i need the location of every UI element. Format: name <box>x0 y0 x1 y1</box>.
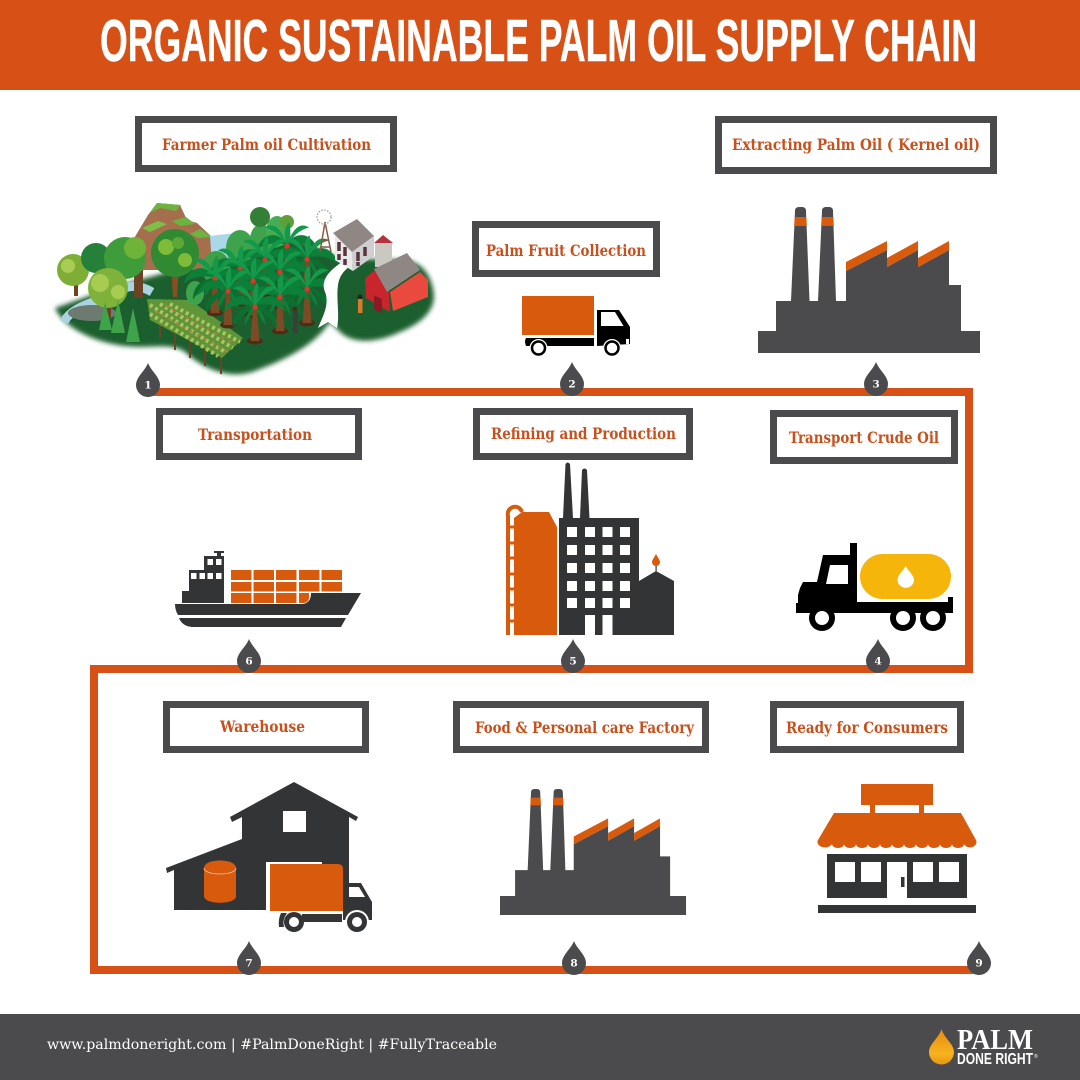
logo <box>929 1025 1038 1068</box>
label: Farmer Palm oil Cultivation: Farmer Palm oil Cultivation <box>162 135 371 154</box>
store sign <box>861 784 933 813</box>
tank oil drop <box>898 566 914 588</box>
store front <box>827 854 967 898</box>
icon: extraction factory <box>758 207 980 353</box>
logo oil drop <box>929 1029 954 1064</box>
storage tank with ladder <box>508 507 557 635</box>
white path <box>318 262 355 328</box>
label: Farmer Palm oil Cultivation <box>138 120 394 168</box>
factory orange accents <box>794 217 949 271</box>
label: Refining and Production: Refining and Production <box>491 424 676 443</box>
illustration: palm farm landscape <box>55 203 434 374</box>
farmhouse <box>333 219 374 271</box>
label: Food and Personal care Factory: Food & Personal care Factory <box>475 718 695 737</box>
step marker 4: 4 <box>874 656 882 668</box>
step marker 5 <box>561 639 585 673</box>
icon: food and personal care factory <box>500 789 686 915</box>
crop rows <box>147 299 243 374</box>
icon: collection truck <box>522 296 630 357</box>
icon: refinery <box>508 462 674 635</box>
ground <box>55 236 434 374</box>
truck chassis and wheels <box>302 914 342 922</box>
building with windows <box>559 518 674 635</box>
step marker 1: 1 <box>144 380 152 392</box>
step marker 7: 7 <box>245 958 253 970</box>
ship hull <box>175 593 361 615</box>
woman figure <box>358 294 362 313</box>
ship superstructure <box>182 551 224 603</box>
truck cab <box>343 883 372 920</box>
label: Palm Fruit Collection <box>476 224 656 274</box>
label: Warehouse <box>166 704 366 750</box>
label: Transport Crude Oil <box>774 414 954 460</box>
label: Ready for Consumers <box>774 704 960 750</box>
label: Extracting Palm Oil <box>718 120 994 170</box>
icon: warehouse with truck <box>166 782 372 934</box>
step marker 8 <box>562 941 586 975</box>
silo <box>374 235 393 267</box>
logo: ® <box>1034 1053 1038 1060</box>
label: Extracting Palm Oil: Extracting Palm Oil ( Kernel oil) <box>732 135 980 154</box>
containers <box>231 570 342 603</box>
cab and chassis <box>796 543 953 613</box>
conifers <box>99 300 140 342</box>
label: Warehouse: Warehouse <box>219 717 305 736</box>
background bushes <box>186 207 294 305</box>
wheels <box>809 605 835 631</box>
factory body <box>758 207 980 353</box>
rocks <box>68 305 116 321</box>
icon: tanker truck <box>796 543 953 631</box>
label: Transport Crude Oil: Transport Crude Oil <box>789 428 939 447</box>
step marker 5: 5 <box>569 656 577 668</box>
factory orange accents <box>530 798 660 844</box>
flame <box>652 554 660 566</box>
warehouse building <box>166 782 358 910</box>
step marker 1 <box>136 363 160 397</box>
supply chain connector line <box>94 392 980 970</box>
chimneys <box>563 462 590 518</box>
step marker 2: 2 <box>568 378 576 390</box>
icon: container ship <box>175 551 361 627</box>
farmer figure <box>292 306 298 333</box>
footer band <box>0 1014 1080 1080</box>
label: Transportation <box>160 412 358 456</box>
ship windows <box>191 559 222 579</box>
river <box>64 286 152 322</box>
footer links: www.palmdoneright.com | #PalmDoneRight | #FullyTraceable <box>47 1037 497 1053</box>
barrel <box>204 860 236 903</box>
red barn <box>365 253 428 313</box>
striped awning <box>817 813 976 848</box>
label: Refining and Production <box>476 412 690 456</box>
label: Ready for Consumers: Ready for Consumers <box>786 718 948 737</box>
palm trees <box>184 222 338 344</box>
step marker 6: 6 <box>245 656 253 668</box>
windmill <box>317 210 331 252</box>
step marker 9: 9 <box>975 958 983 970</box>
step marker 7 <box>237 941 261 975</box>
icon: retail store <box>817 784 976 913</box>
step marker 3: 3 <box>872 378 880 390</box>
forest trees <box>57 229 199 318</box>
step marker 3 <box>864 362 888 396</box>
mountain <box>130 203 212 270</box>
label: Transportation: Transportation <box>198 425 312 444</box>
step marker 4 <box>866 639 890 673</box>
factory body <box>500 789 686 915</box>
truck cargo box <box>270 864 343 911</box>
logo wordmark: PALM <box>957 1025 1033 1056</box>
step marker 9 <box>967 941 991 975</box>
label: Palm Fruit Collection: Palm Fruit Collection <box>486 241 646 260</box>
logo: DONE RIGHT <box>957 1051 1033 1068</box>
step marker 2 <box>560 362 584 396</box>
step marker 6 <box>237 639 261 673</box>
lake <box>210 233 240 266</box>
step marker 8: 8 <box>570 958 578 970</box>
label: Food and Personal care Factory <box>456 704 706 750</box>
header band with title <box>0 0 1080 90</box>
